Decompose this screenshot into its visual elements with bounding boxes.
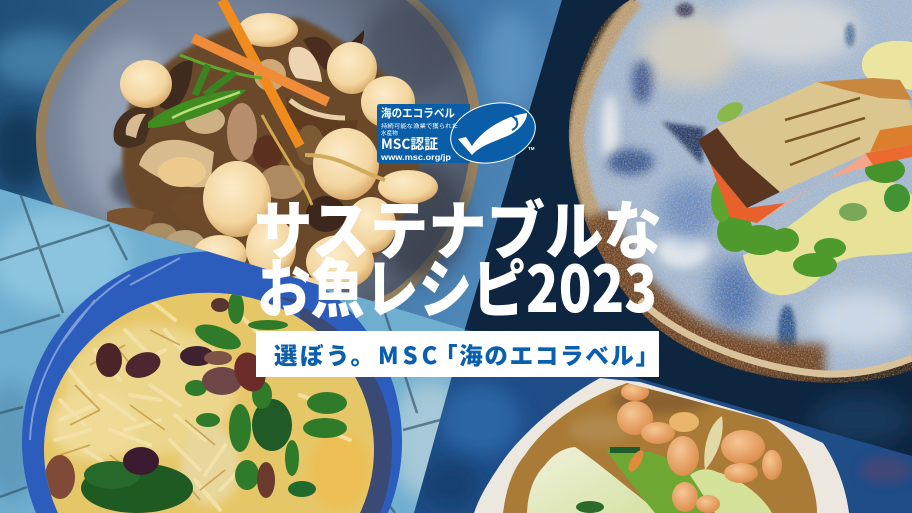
blue bowl rim [22, 251, 402, 513]
panel: bottom-right photo, shrimp and bok choy soup [400, 320, 912, 513]
herbs [185, 292, 347, 497]
logo text: 海のエコラベル [381, 105, 455, 121]
food base [122, 18, 422, 292]
carrot strips and scallions [148, 0, 385, 205]
salmon [698, 78, 912, 223]
subtitle banner [256, 331, 661, 377]
trademark: TM [528, 146, 535, 151]
olives [45, 298, 275, 499]
icon: blue check fish [458, 113, 527, 155]
logo text: 水産物 [381, 129, 398, 137]
subtitle text: MSC [378, 337, 441, 371]
panel: top-left photo, scallops and mushrooms in grey bowl [0, 0, 600, 340]
plate surface with glaze [560, 0, 912, 390]
bowl rim [36, 0, 480, 302]
MSC ecolabel logo [377, 94, 542, 172]
panel: top-right photo, salmon on ceramic plate [440, 0, 912, 460]
plate edge [569, 0, 912, 383]
broth with toppings [500, 380, 820, 513]
bowl interior shadow [250, 292, 392, 513]
mushrooms [107, 30, 364, 258]
logo text [380, 105, 458, 162]
title line 2: お魚レシピ2023 [257, 239, 657, 331]
title: サステナブルな / お魚レシピ2023 [254, 181, 662, 331]
title line 1: サステナブルな [254, 181, 662, 273]
panel: bottom-left photo, noodles in blue bowl on tiles [0, 180, 470, 513]
pesto [81, 463, 193, 513]
bok choy [527, 447, 660, 513]
noodle food [44, 293, 374, 513]
logo text: 持続可能な漁業で獲られた [381, 122, 458, 130]
subtitle text: 選ぼう。 [274, 337, 374, 371]
subtitle text: 「海のエコラベル」 [434, 337, 661, 371]
scallops [120, 13, 438, 308]
shrimps [621, 383, 649, 401]
peas [711, 98, 910, 277]
logo text: MSC認証 [381, 134, 438, 154]
bowl interior [46, 0, 469, 301]
sauce [743, 41, 912, 295]
white bowl [474, 378, 849, 513]
logo text: www.msc.org/jp [380, 152, 451, 162]
logo oval with outline [444, 94, 542, 172]
